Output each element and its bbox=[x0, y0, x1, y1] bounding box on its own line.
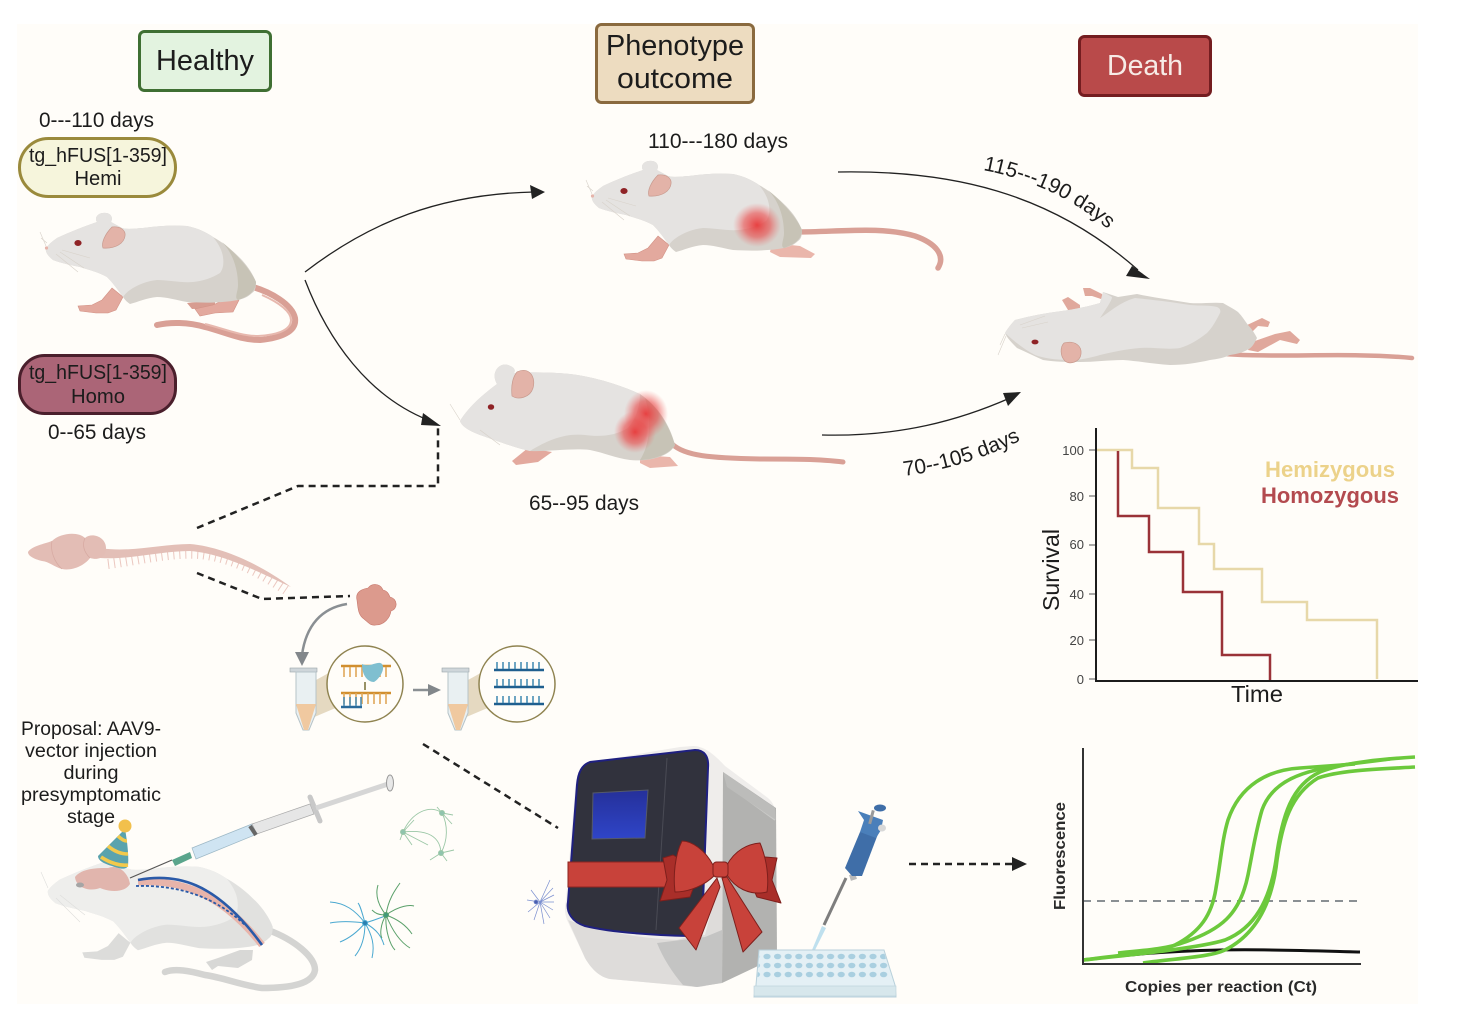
arrow: instrument to amplification plot bbox=[909, 857, 1027, 871]
icon: red bow bbox=[660, 841, 781, 952]
qPCR amplification chart bbox=[1052, 748, 1415, 996]
icon: tissue sample bbox=[357, 584, 396, 625]
heading: Phenotype outcome bbox=[596, 24, 754, 102]
text: AAV9 proposal: during bbox=[64, 762, 118, 784]
icon: neuron cluster, pale green bbox=[400, 807, 454, 861]
icon: reverse transcription tube and inset bbox=[290, 646, 403, 730]
dashed connector: cDNA to qPCR bbox=[423, 744, 558, 828]
dashed connector: spinal cord to tissue sample bbox=[197, 573, 350, 599]
survival chart: 80 bbox=[1070, 489, 1084, 504]
heading: Phenotype outcome: outcome bbox=[617, 63, 733, 95]
icon: treated mouse with brain, spinal cord and party hat bbox=[41, 820, 315, 988]
icon: brain and spinal cord bbox=[28, 534, 291, 590]
icon: dead mouse bbox=[998, 288, 1412, 365]
label: homo survival range: 70--105 days bbox=[903, 432, 1019, 476]
icon: qPCR instrument with ribbon bbox=[565, 746, 777, 987]
text: AAV9 proposal: stage bbox=[67, 806, 115, 828]
genotype pill: Homo bbox=[20, 356, 176, 414]
survival chart: 40 bbox=[1070, 587, 1084, 602]
heading: Death: Death bbox=[1107, 50, 1183, 82]
heading: Phenotype outcome: Phenotype bbox=[606, 30, 744, 62]
survival chart: 100 bbox=[1062, 443, 1084, 458]
genotype pill: Hemi: Hemi bbox=[74, 168, 122, 190]
survival chart: 20 bbox=[1070, 633, 1084, 648]
survival chart: 0 bbox=[1077, 672, 1084, 687]
icon: syringe bbox=[130, 775, 394, 878]
icon: neurons, blue and green bbox=[330, 883, 414, 958]
dashed connector: spinal cord to homo mouse bbox=[197, 425, 438, 528]
text: AAV9 proposal: Proposal: AAV9- bbox=[21, 718, 161, 740]
genotype pill: Homo: tg_hFUS[1-359] bbox=[29, 362, 167, 384]
survival chart: Homozygous bbox=[1261, 483, 1399, 508]
qPCR amplification chart: Fluorescence bbox=[1052, 802, 1069, 910]
label: homo phenotype age range: 65--95 days bbox=[529, 492, 639, 515]
genotype pill: Hemi: tg_hFUS[1-359] bbox=[29, 145, 167, 167]
icon: 96-well plate bbox=[754, 950, 896, 997]
arrow: healthy to homo phenotype bbox=[305, 280, 441, 426]
arrow: hemi phenotype to death bbox=[838, 172, 1150, 279]
survival chart bbox=[1038, 428, 1418, 707]
label: hemi phenotype age range: 110---180 days bbox=[648, 130, 788, 153]
icon: homo phenotype mouse with red lesions bbox=[450, 364, 843, 468]
heading: Death bbox=[1080, 36, 1210, 96]
label: homo age range: 0--65 days bbox=[48, 421, 146, 444]
arrow: healthy to hemi phenotype bbox=[305, 185, 545, 272]
heading: Healthy bbox=[140, 32, 270, 90]
icon: hemi phenotype mouse with red lesion bbox=[586, 161, 941, 268]
icon: neuron, dark blue bbox=[527, 880, 554, 924]
arrow: tube to tube bbox=[413, 684, 441, 696]
heading: Healthy: Healthy bbox=[156, 45, 254, 77]
survival chart: Time bbox=[1231, 681, 1283, 707]
text: AAV9 proposal bbox=[21, 718, 161, 828]
survival chart: Hemizygous bbox=[1265, 457, 1395, 482]
arrow: homo phenotype to death bbox=[822, 392, 1021, 435]
icon: pipette bbox=[812, 804, 886, 950]
genotype pill: Hemi bbox=[20, 138, 176, 196]
survival chart: Survival bbox=[1038, 529, 1064, 611]
label: hemi survival range: 115---190 days bbox=[984, 157, 1114, 228]
label: hemi age range: 0---110 days bbox=[39, 109, 154, 132]
icon: healthy mouse bbox=[40, 213, 295, 340]
survival chart: 60 bbox=[1070, 537, 1084, 552]
text: AAV9 proposal: vector injection bbox=[25, 740, 157, 762]
arrow: sample to tube bbox=[295, 604, 347, 666]
text: AAV9 proposal: presymptomatic bbox=[21, 784, 161, 806]
genotype pill: Homo: Homo bbox=[71, 386, 125, 408]
qPCR amplification chart: Copies per reaction (Ct) bbox=[1125, 979, 1317, 996]
icon: cDNA tube and inset bbox=[442, 646, 555, 730]
